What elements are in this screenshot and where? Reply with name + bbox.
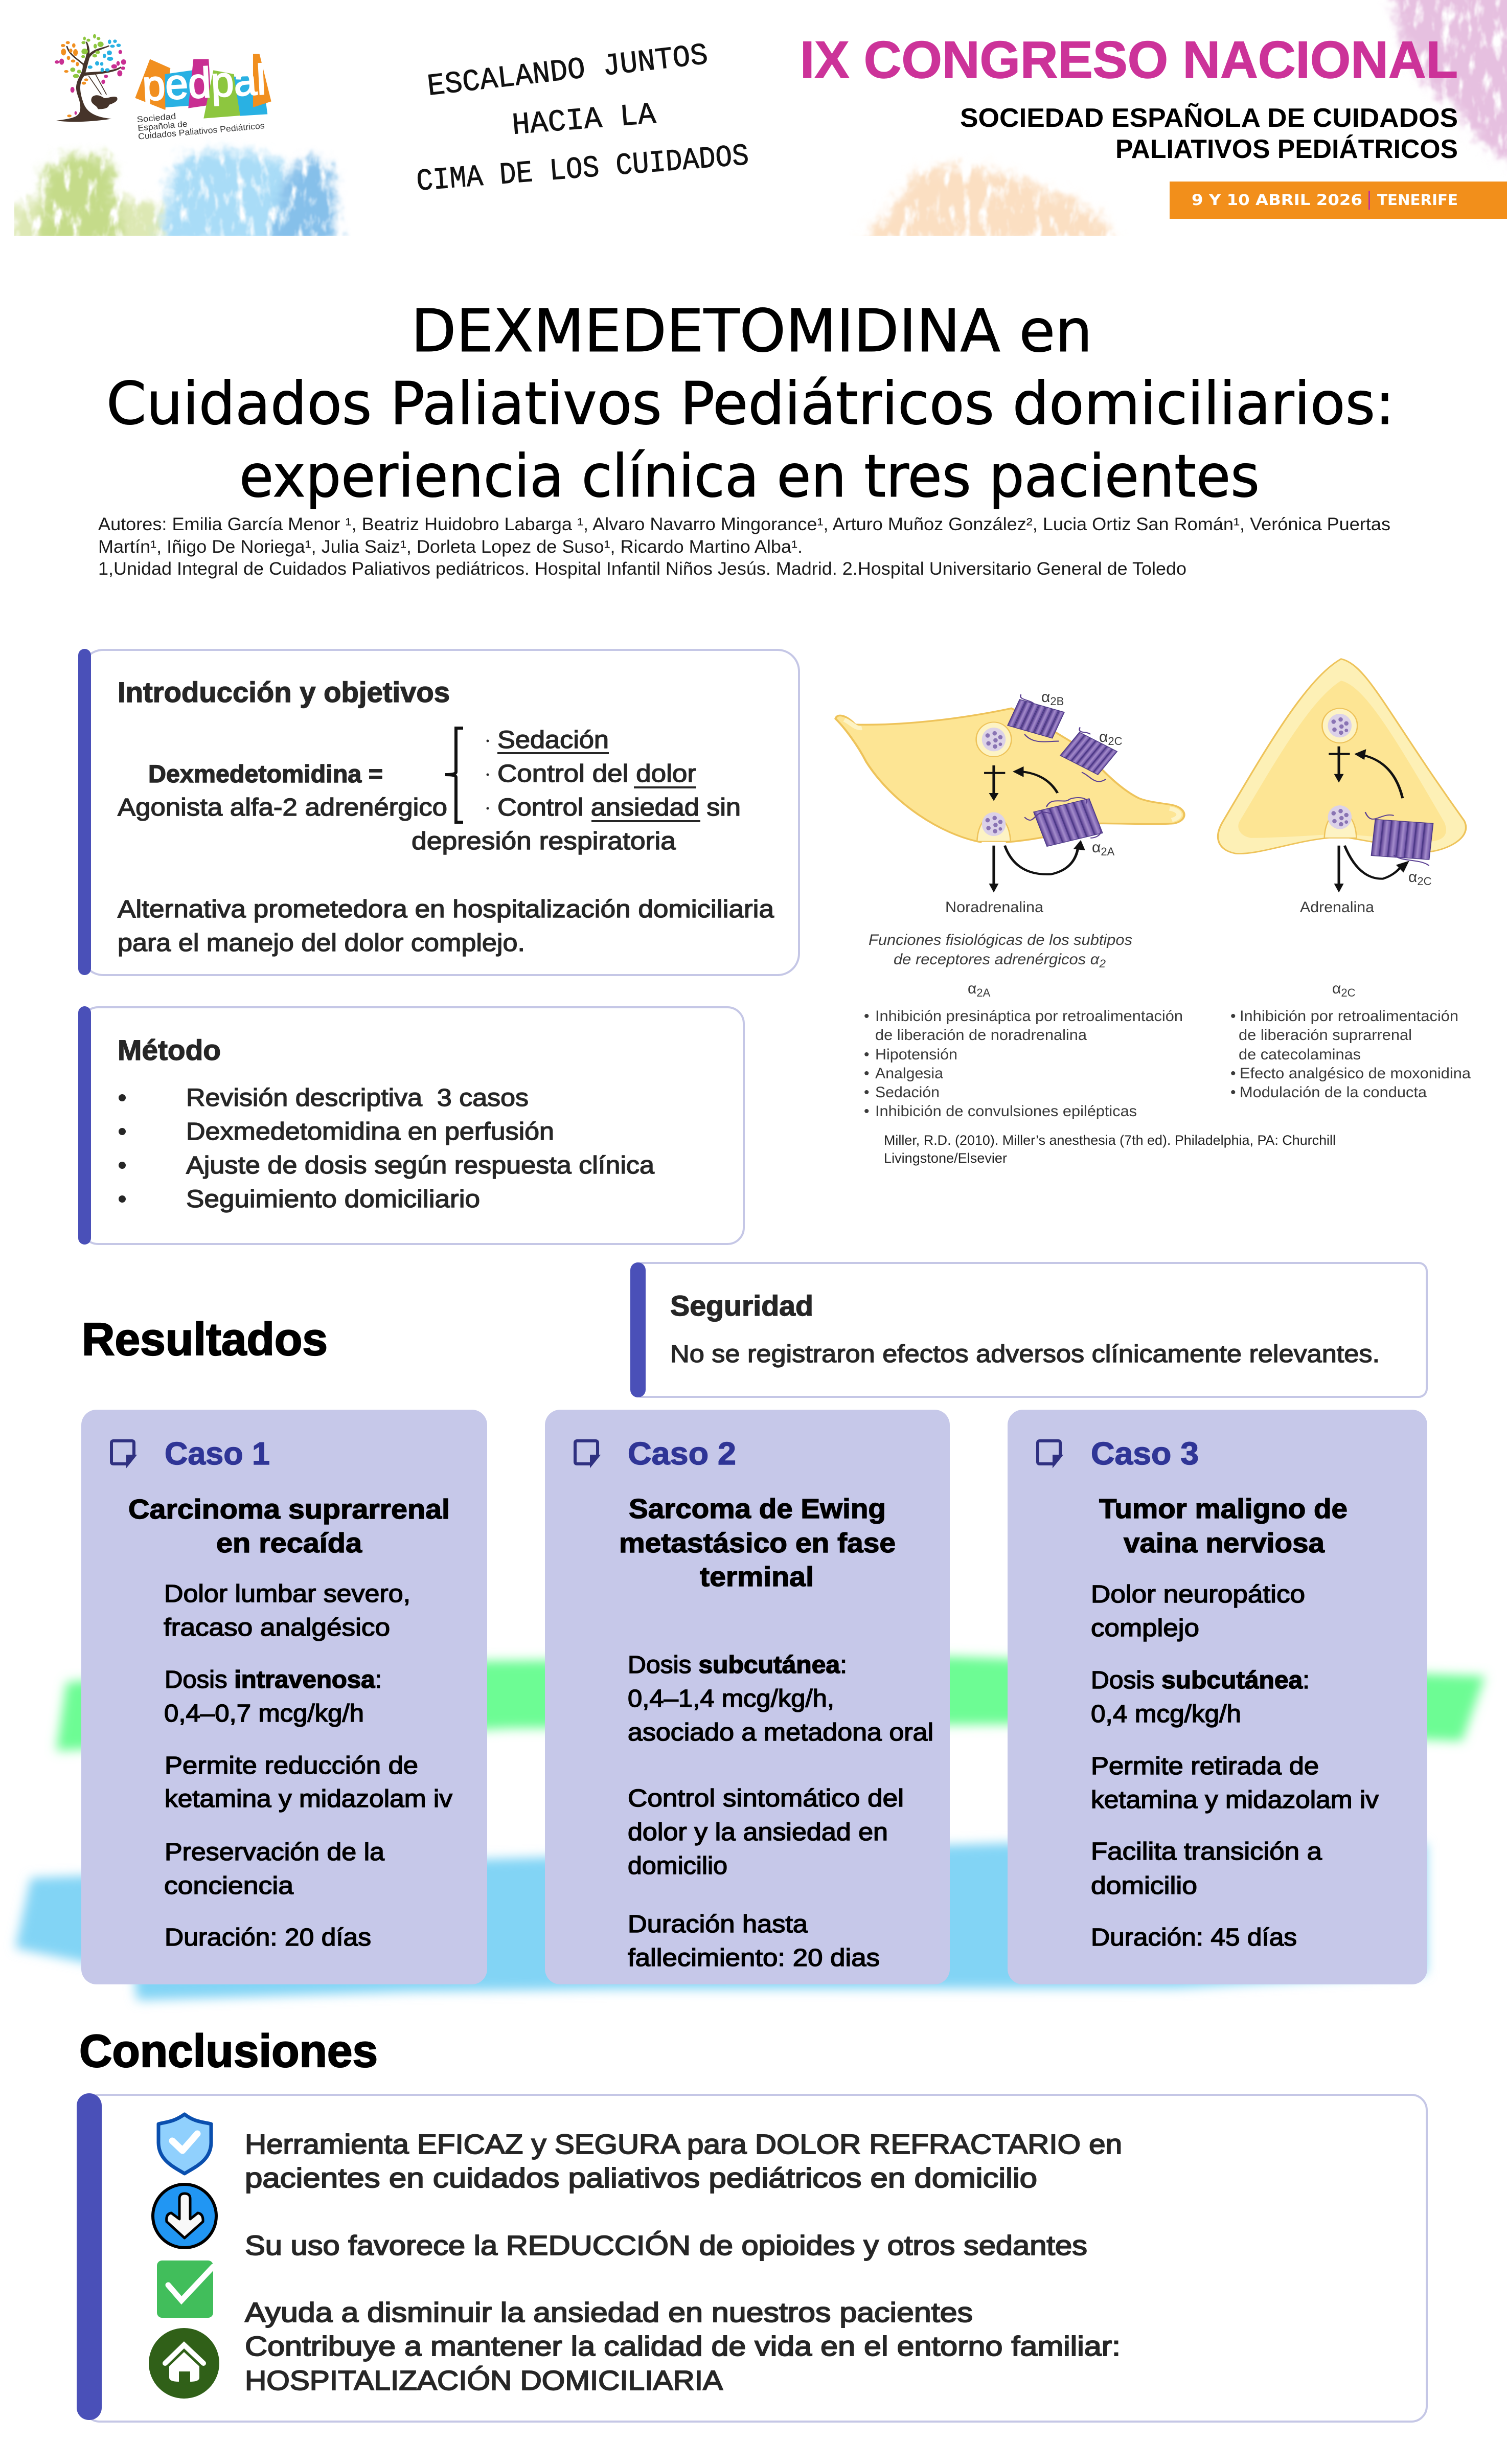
conclusion statements: Ayuda a disminuir la ansiedad en nuestros pacientes [245, 2297, 973, 2328]
panel: método [78, 1006, 744, 1245]
congress heading: IX CONGRESO NACIONAL [800, 31, 1458, 89]
case title [1099, 1494, 1348, 1558]
conclusion text [118, 896, 774, 957]
definition [118, 761, 447, 821]
society name [960, 103, 1458, 164]
diagram labels: α [1041, 689, 1050, 706]
case title: metastásico en fase [619, 1528, 896, 1558]
alpha 2C functions: de catecolaminas [1239, 1046, 1361, 1063]
icon: green check [157, 2260, 213, 2318]
safety statement: No se registraron efectos adversos clínicamente relevantes. [670, 1341, 1380, 1368]
method bullets: Dexmedetomidina en perfusión [186, 1118, 554, 1145]
logo wordmark: pedpal [141, 56, 267, 110]
case details: ketamina y midazolam iv [1091, 1787, 1379, 1814]
alpha 2A functions: • [864, 1103, 870, 1120]
logo subtitle: Española de [138, 119, 188, 133]
diagram labels: 2A [1101, 845, 1115, 858]
background watercolor blob: blue header [158, 151, 337, 245]
case title: Sarcoma de Ewing [629, 1494, 886, 1524]
case details: domicilio [1091, 1872, 1197, 1900]
case label: Caso 3 [1091, 1436, 1199, 1472]
alpha 2C functions: α [1332, 980, 1341, 997]
case details: Dosis subcutánea: [628, 1652, 847, 1679]
background watercolor blob: green header [10, 154, 164, 245]
case details: conciencia [164, 1872, 293, 1900]
diagram: adrenergic cell [1218, 659, 1466, 893]
panel: introducción y objetivos [78, 649, 799, 975]
alpha 2A functions [864, 980, 1183, 1120]
diagram: noradrenergic neuron [835, 694, 1184, 893]
panel: caso 1 [81, 1410, 487, 1984]
icon: note [575, 1441, 598, 1464]
date band: TENERIFE [1377, 191, 1458, 209]
case details: complejo [1091, 1615, 1199, 1642]
background band: blue [15, 1843, 1426, 2000]
heading: conclusiones: Conclusiones [79, 2026, 378, 2077]
case title [128, 1494, 450, 1558]
conclusion statements [245, 2129, 1122, 2396]
icon: shield [158, 2114, 211, 2174]
effects list [412, 727, 741, 855]
method bullets: Ajuste de dosis según respuesta clínica [186, 1152, 654, 1179]
alpha 2A functions: de liberación de noradrenalina [875, 1027, 1087, 1044]
alpha 2C functions: Inhibición por retroalimentación [1240, 1008, 1458, 1025]
method bullets: Seguimiento domiciliario [186, 1186, 480, 1213]
figure: adrenergic receptors [835, 659, 1471, 1166]
slogan handwritten: CIMA DE LOS CUIDADOS [415, 139, 750, 200]
icon: pedpal colour blocks [135, 54, 271, 119]
figure caption: Funciones fisiológicas de los subtipos [869, 932, 1132, 948]
heading: seguridad: Seguridad [670, 1290, 813, 1322]
case details: Dosis subcutánea: [1091, 1667, 1310, 1694]
case details: Duración: 20 días [165, 1924, 371, 1951]
diagram labels: 2C [1108, 735, 1123, 748]
conclusion statements: HOSPITALIZACIÓN DOMICILIARIA [245, 2365, 723, 2396]
case details: domicilio [628, 1852, 727, 1880]
conclusion statements: pacientes en cuidados paliativos pediátricos en domicilio [245, 2163, 1037, 2194]
effects list: Sedación [497, 727, 609, 754]
authors: Martín¹, Iñigo De Noriega¹, Julia Saiz¹, Dorleta Lopez de Suso¹, Ricardo Martino Alba¹. [98, 537, 803, 557]
heading: método: Método [118, 1034, 221, 1066]
alpha 2A functions: Inhibición presináptica por retroalimentación [875, 1008, 1183, 1025]
icon: note [1038, 1441, 1060, 1464]
diagram labels: 2C [1417, 875, 1432, 888]
definition: Dexmedetomidina = [148, 761, 383, 788]
case details: Control sintomático del [628, 1785, 904, 1812]
conclusion statements: Herramienta EFICAZ y SEGURA para DOLOR REFRACTARIO en [245, 2129, 1122, 2160]
case details: Dosis intravenosa: [165, 1666, 382, 1693]
case details: fallecimiento: 20 dias [628, 1945, 880, 1972]
case details: Facilita transición a [1091, 1838, 1322, 1865]
panel: caso 3 [1008, 1410, 1427, 1984]
effects list: Control del dolor [497, 760, 696, 787]
figure caption [869, 932, 1132, 970]
case details: Duración: 45 días [1091, 1924, 1297, 1951]
case details [628, 1652, 933, 1972]
case details: Preservación de la [165, 1839, 384, 1866]
logo subtitle [136, 111, 265, 142]
slogan handwritten: HACIA LA [511, 98, 657, 144]
alpha 2C functions: • [1230, 1008, 1236, 1025]
case details: 0,4–1,4 mcg/kg/h, [628, 1685, 834, 1712]
icon: home [149, 2328, 219, 2399]
panel: caso 2 [545, 1410, 950, 1984]
alpha 2A functions: α [968, 980, 976, 997]
case details: ketamina y midazolam iv [165, 1785, 452, 1813]
case title [619, 1494, 896, 1592]
case details: 0,4 mcg/kg/h [1091, 1701, 1241, 1728]
diagram labels: α [1099, 729, 1108, 745]
figure caption: 2 [1099, 957, 1106, 970]
diagram labels: Adrenalina [1300, 899, 1374, 916]
alpha 2C functions: • [1230, 1084, 1236, 1101]
case title: Tumor maligno de [1099, 1494, 1348, 1524]
case details [1091, 1581, 1379, 1951]
case details: Permite retirada de [1091, 1753, 1319, 1780]
case title: vaina nerviosa [1124, 1528, 1325, 1558]
conclusion text: para el manejo del dolor complejo. [118, 930, 525, 957]
slogan handwritten [415, 38, 750, 200]
slogan handwritten: ESCALANDO JUNTOS [425, 38, 710, 105]
citation [884, 1133, 1336, 1166]
icon: tree with swing [55, 34, 126, 122]
conclusion statements: Su uso favorece la REDUCCIÓN de opioides y otros sedantes [245, 2230, 1087, 2261]
alpha 2C functions: 2C [1341, 986, 1356, 999]
background band: green [56, 1657, 1485, 1751]
case details: 0,4–0,7 mcg/kg/h [164, 1700, 364, 1727]
case details: Permite reducción de [165, 1752, 418, 1779]
method bullets: Revisión descriptiva 3 casos [186, 1084, 529, 1112]
heading: resultados: Resultados [82, 1314, 328, 1365]
title [106, 297, 1395, 511]
alpha 2A functions: • [864, 1046, 870, 1063]
conclusion statements: Contribuye a mantener la calidad de vida en el entorno familiar: [245, 2331, 1121, 2362]
title: DEXMEDETOMIDINA en [411, 297, 1092, 366]
background watercolor blob: pink header [1390, 0, 1507, 164]
alpha 2C functions: Modulación de la conducta [1240, 1084, 1427, 1101]
method bullets [119, 1084, 654, 1213]
panel: seguridad [630, 1262, 1427, 1397]
case details: Dolor lumbar severo, [164, 1580, 410, 1608]
alpha 2C functions [1230, 980, 1471, 1101]
case label: Caso 2 [628, 1436, 736, 1472]
authors: Autores: Emilia García Menor ¹, Beatriz Huidobro Labarga ¹, Alvaro Navarro Mingorance¹, Arturo Muñoz González², Lucia Ortiz San Román¹, Verónica Puertas [98, 514, 1390, 534]
case details [164, 1580, 452, 1951]
alpha 2C functions: • [1230, 1065, 1236, 1082]
society name: PALIATIVOS PEDIÁTRICOS [1115, 134, 1458, 164]
diagram labels [945, 689, 1432, 916]
case title: terminal [700, 1562, 814, 1592]
effects list: depresión respiratoria [412, 828, 676, 855]
case details: asociado a metadona oral [628, 1719, 933, 1746]
society name: SOCIEDAD ESPAÑOLA DE CUIDADOS [960, 103, 1458, 133]
citation: Miller, R.D. (2010). Miller’s anesthesia (7th ed). Philadelphia, PA: Churchill [884, 1133, 1336, 1148]
alpha 2C functions: Efecto analgésico de moxonidina [1240, 1065, 1471, 1082]
logo subtitle: Sociedad [136, 111, 176, 124]
alpha 2A functions: 2A [976, 986, 991, 999]
background watercolor blob: orange header [859, 166, 1117, 245]
alpha 2A functions: Hipotensión [875, 1046, 957, 1063]
bracket [445, 728, 463, 822]
diagram labels: Noradrenalina [945, 899, 1043, 916]
title: Cuidados Paliativos Pediátricos domiciliarios: [106, 370, 1395, 438]
case title: en recaída [216, 1528, 362, 1558]
alpha 2A functions: Inhibición de convulsiones epilépticas [875, 1103, 1137, 1120]
alpha 2A functions: Sedación [875, 1084, 940, 1101]
case details: fracaso analgésico [164, 1614, 390, 1641]
date band [1170, 182, 1507, 219]
alpha 2C functions: de liberación suprarrenal [1239, 1027, 1412, 1044]
case label: Caso 1 [165, 1436, 270, 1472]
logo: Pedpal [55, 34, 271, 142]
citation: Livingstone/Elsevier [884, 1150, 1007, 1166]
panel: conclusiones [77, 2093, 1427, 2422]
icon: down arrow [153, 2184, 216, 2248]
diagram labels: 2B [1050, 695, 1064, 708]
authors: 1,Unidad Integral de Cuidados Paliativos pediátricos. Hospital Infantil Niños Jesús. Madrid. 2.Hospital Universitario General de Toledo [98, 559, 1186, 579]
alpha 2A functions: Analgesia [875, 1065, 943, 1082]
alpha 2A functions: • [864, 1008, 870, 1025]
alpha 2A functions: • [864, 1065, 870, 1082]
date band: 9 Y 10 ABRIL 2026 [1192, 191, 1362, 209]
diagram labels: α [1408, 869, 1417, 886]
authors [98, 514, 1390, 579]
case title: Carcinoma suprarrenal [128, 1494, 450, 1525]
alpha 2A functions: • [864, 1084, 870, 1101]
diagram labels: α [1092, 839, 1101, 856]
case details: Duración hasta [628, 1911, 808, 1938]
case details: dolor y la ansiedad en [628, 1819, 888, 1846]
title: experiencia clínica en tres pacientes [239, 442, 1260, 511]
heading: introducción: Introducción y objetivos [118, 676, 450, 708]
case details: Dolor neuropático [1091, 1581, 1305, 1608]
definition: Agonista alfa-2 adrenérgico [118, 794, 447, 821]
icon: note [111, 1441, 134, 1464]
conclusion text: Alternativa prometedora en hospitalización domiciliaria [118, 896, 774, 923]
effects list: Control ansiedad sin [497, 794, 741, 821]
figure caption: de receptores adrenérgicos α [894, 951, 1093, 968]
logo subtitle: Cuidados Paliativos Pediátricos [138, 121, 265, 142]
